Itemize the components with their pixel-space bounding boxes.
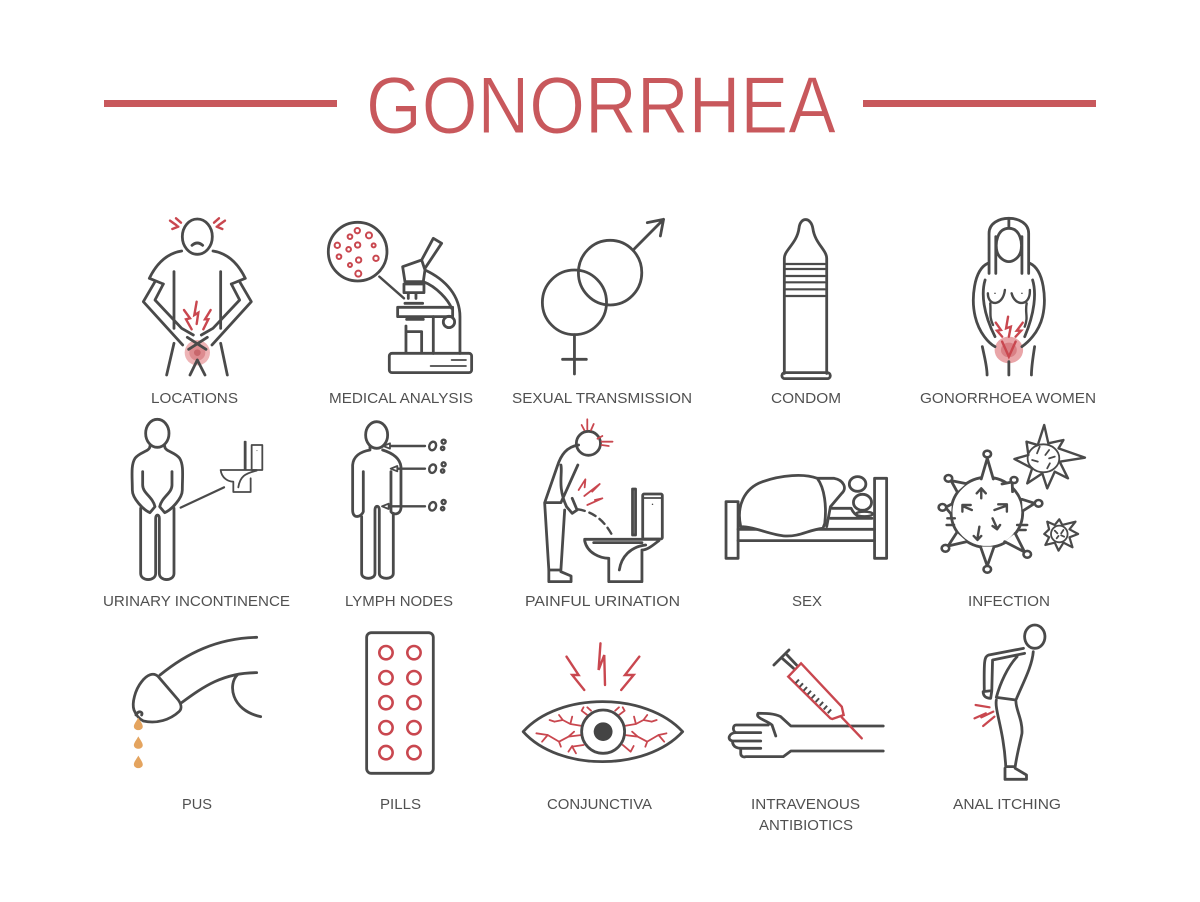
icon: virus particles	[939, 425, 1085, 573]
panel: sexual transmission	[512, 219, 692, 407]
icon: condom	[782, 220, 830, 379]
label	[751, 796, 860, 834]
panel: painful urination	[525, 419, 680, 610]
icon: person with lymph node pointers	[353, 422, 446, 578]
icon: red eye with veins	[523, 643, 683, 762]
panel: conjunctiva	[523, 643, 683, 813]
panel: medical analysis	[328, 222, 473, 407]
panel: gonorrhoea women	[920, 218, 1096, 407]
label: CONDOM	[771, 390, 841, 407]
label: PAINFUL URINATION	[525, 593, 680, 610]
panel: lymph nodes	[345, 422, 453, 610]
panel: infection	[939, 425, 1085, 610]
icon: man with groin pain	[143, 218, 251, 375]
label: ANTIBIOTICS	[759, 817, 853, 834]
icon: interlocked gender symbols	[542, 219, 664, 374]
label: GONORRHOEA WOMEN	[920, 390, 1096, 407]
panel: urinary incontinence	[103, 419, 290, 610]
label: PILLS	[380, 796, 421, 813]
icon: blister pack	[367, 633, 433, 773]
icon: bent man with itching pain	[974, 625, 1045, 779]
icon: penis with pus drops	[133, 637, 261, 768]
label: SEX	[792, 593, 822, 610]
panel: sex	[726, 475, 887, 610]
label: MEDICAL ANALYSIS	[329, 390, 473, 407]
panel: anal itching	[953, 625, 1061, 813]
panel: pills	[367, 633, 433, 813]
label: CONJUNCTIVA	[547, 796, 652, 813]
icon: woman with pelvic pain	[973, 218, 1044, 375]
label: LYMPH NODES	[345, 593, 453, 610]
label: LOCATIONS	[151, 390, 238, 407]
icon: couple under blanket in bed	[726, 475, 887, 558]
title	[104, 61, 1096, 151]
panel: intravenous antibiotics	[729, 650, 883, 834]
icon: syringe in arm	[729, 650, 883, 757]
icon: person and toilet	[132, 419, 262, 580]
label: SEXUAL TRANSMISSION	[512, 390, 692, 407]
label: PUS	[182, 796, 212, 813]
label: URINARY INCONTINENCE	[103, 593, 290, 610]
label: INTRAVENOUS	[751, 796, 860, 813]
panel: pus	[133, 637, 261, 813]
label: ANAL ITCHING	[953, 796, 1061, 813]
title: GONORRHEA	[366, 61, 836, 151]
panel: condom	[771, 220, 841, 407]
icon: man urinating at toilet	[545, 419, 662, 582]
label: INFECTION	[968, 593, 1050, 610]
icon: microscope with magnified cells	[328, 222, 472, 373]
panel: locations	[143, 218, 251, 407]
